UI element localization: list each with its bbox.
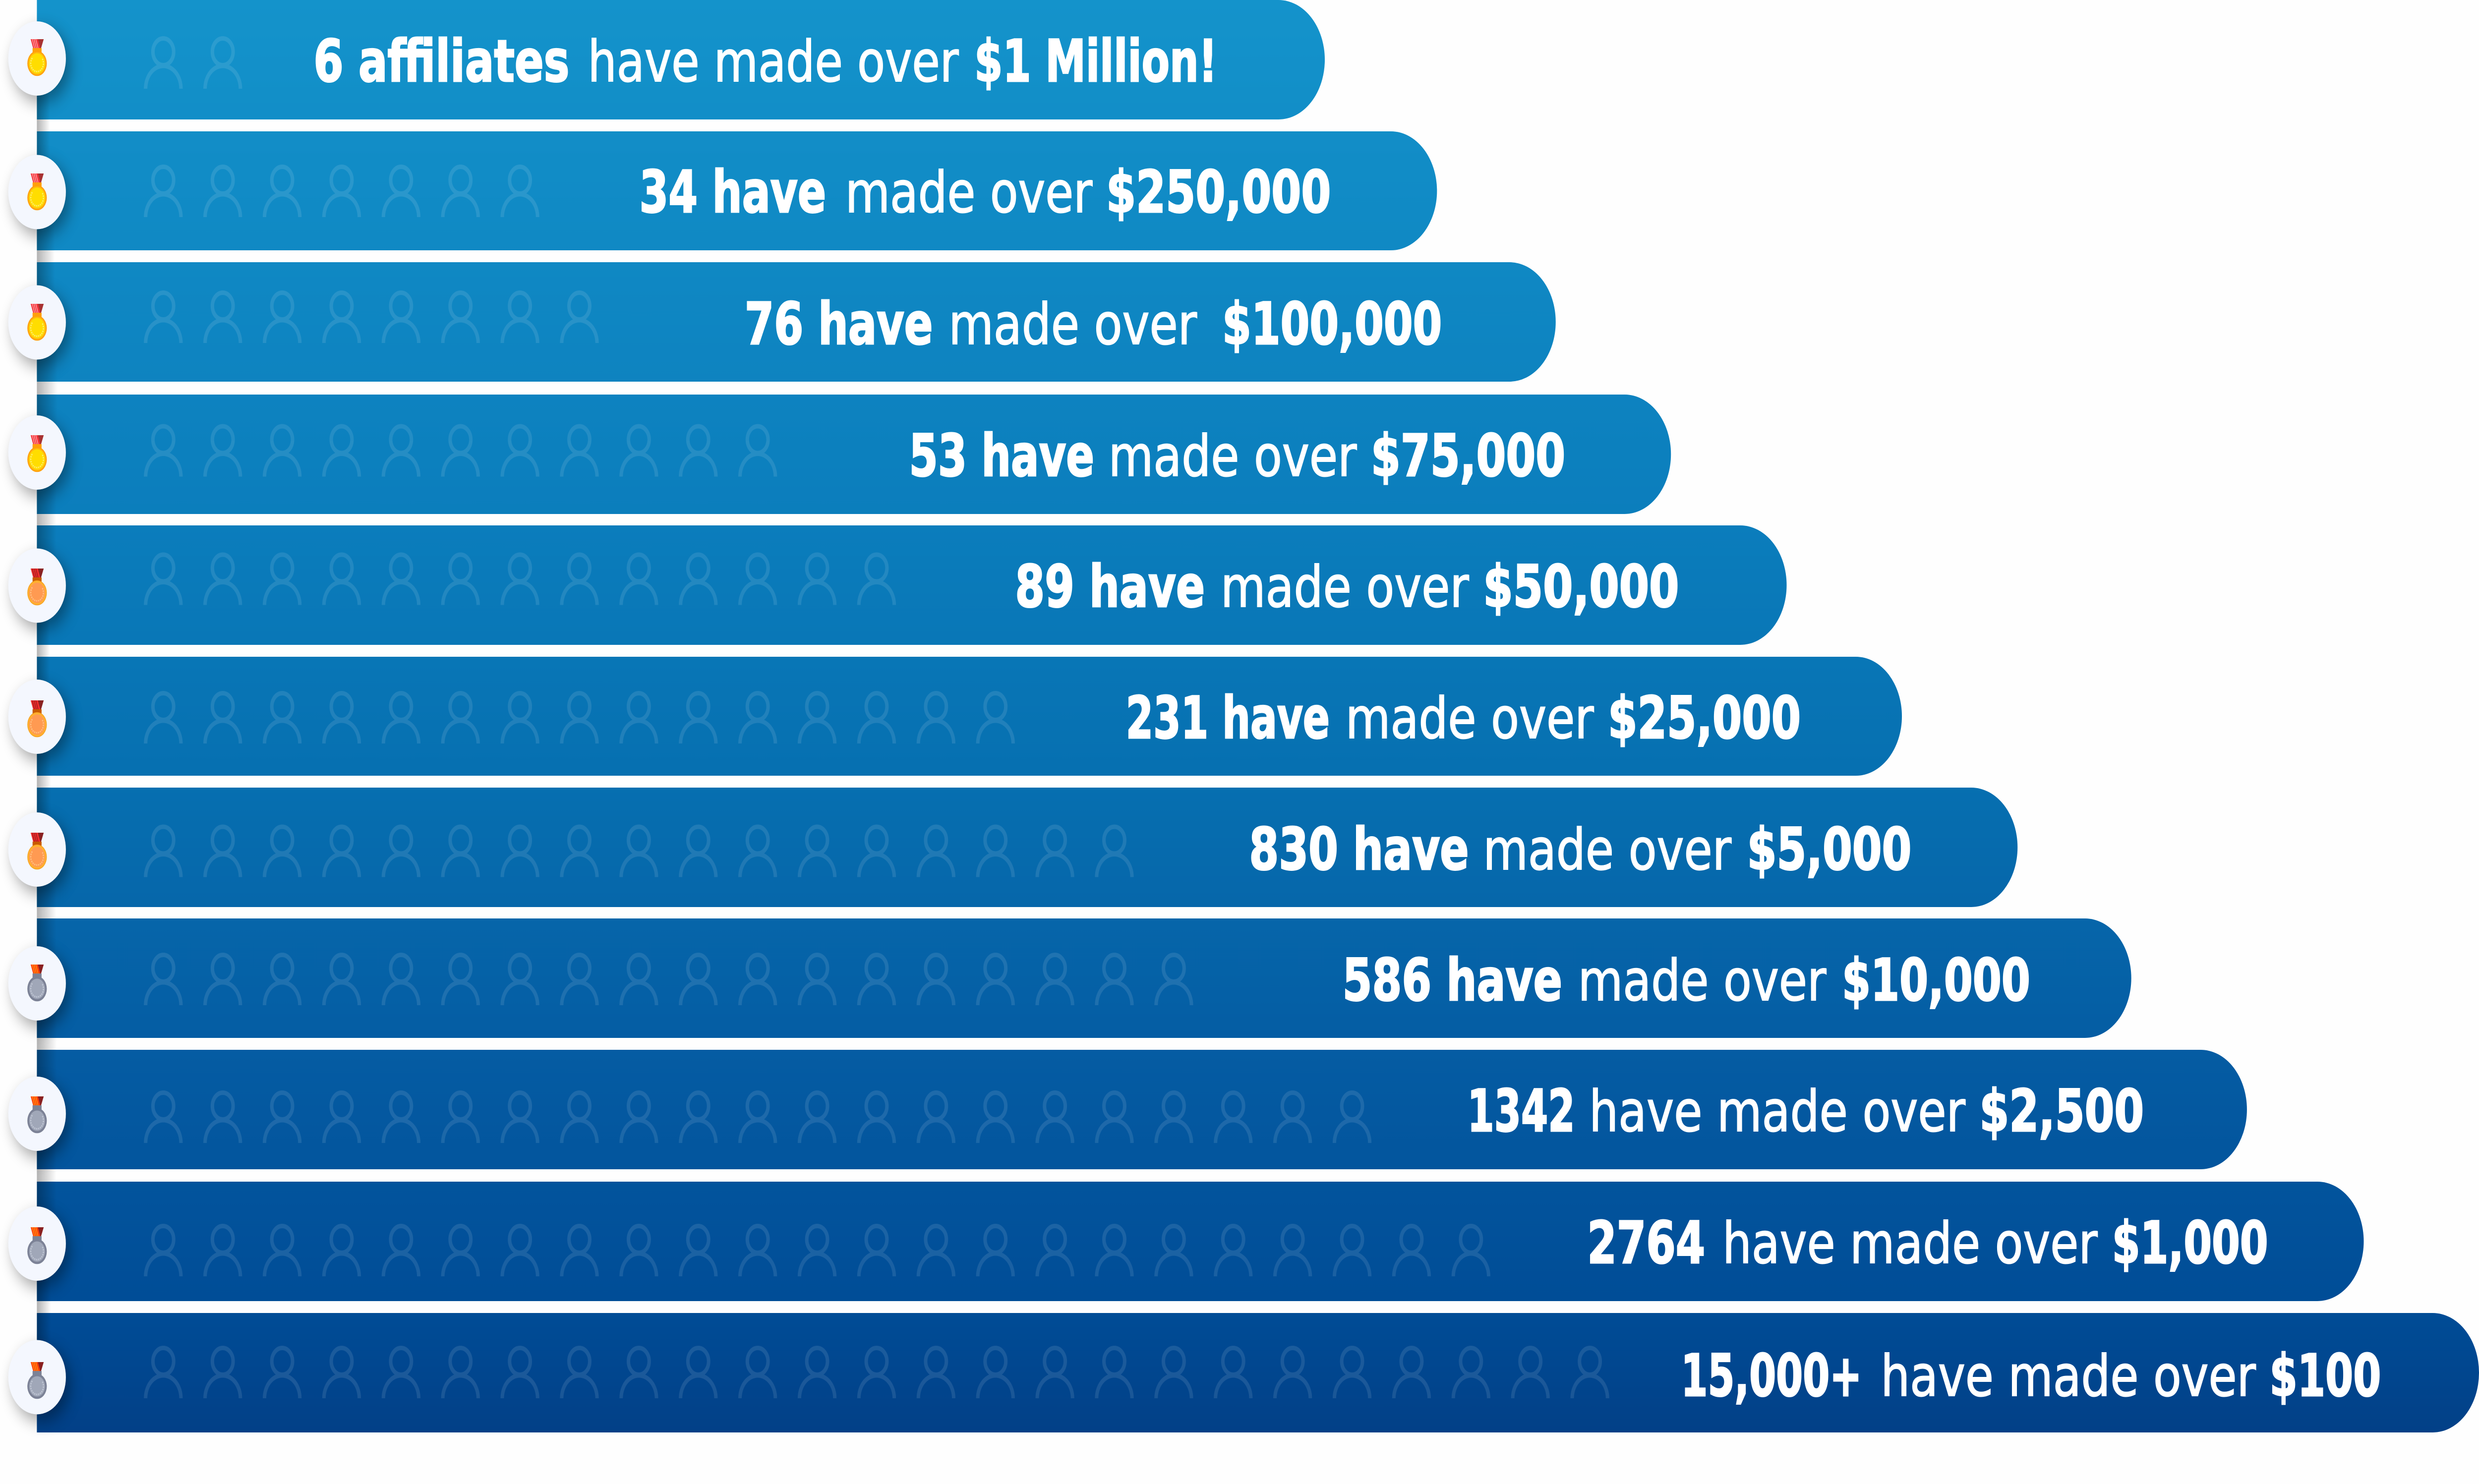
medal badge 3: gold: [8, 285, 66, 360]
bar row 3: 76 have made over $100,000: $100,000: [1222, 290, 1442, 358]
bar row 1: 6 affiliates over $1 Million: [37, 0, 1325, 119]
bar row 7: 830 have made over $5,000: made over: [1483, 817, 1731, 883]
bar row 11: 15,000+ have made over $100: 15,000+: [1681, 1342, 1862, 1410]
bar row 5: 89 have made over $50,000: 89 have: [1015, 553, 1205, 621]
bar row 10: 2764 have made over $1,000: have made over: [1722, 1211, 2098, 1277]
bar row 9: 1342 have made over $2,500: [37, 1050, 2247, 1169]
medal badge 11: silver: [8, 1340, 66, 1415]
bar row 9: 1342 have made over $2,500: $2,500: [1980, 1078, 2144, 1145]
bar row 8: 586 have made over $10,000: 586 have: [1343, 947, 1562, 1014]
medal badge 9: silver: [8, 1077, 66, 1151]
bar row 11: 15,000+ have made over $100: $100: [2270, 1342, 2381, 1410]
bar row 7: 830 have made over $5,000: [37, 788, 2017, 907]
bar row 9: 1342 have made over $2,500: 1342: [1468, 1078, 1575, 1145]
bar row 6: 231 have made over $25,000: 231 have: [1126, 685, 1330, 752]
bar row 5: 89 have made over $50,000: $50,000: [1483, 553, 1679, 621]
medal badge 4: gold: [8, 415, 66, 490]
bar row 10: 2764 have made over $1,000: 2764: [1587, 1209, 1705, 1277]
medal badge 2: gold: [8, 155, 66, 229]
medal badge 7: bronze: [8, 812, 66, 887]
medal badge 10: silver: [8, 1206, 66, 1281]
medal badge 1: gold: [8, 21, 66, 96]
bar row 5: 89 have made over $50,000: made over: [1221, 555, 1469, 621]
bar row 3: 76 have made over $100,000: made over: [948, 292, 1197, 358]
medal badge 8: silver: [8, 946, 66, 1021]
bar row 1: 6 affiliates over $1 Million: 6 affiliates: [313, 28, 569, 95]
bar row 9: 1342 have made over $2,500: have made over: [1589, 1079, 1965, 1145]
bar row 2: 34 have made over $250,000: 34 have: [640, 159, 826, 226]
bar row 8: 586 have made over $10,000: $10,000: [1842, 947, 2030, 1014]
bar row 1: 6 affiliates over $1 Million: have made over: [588, 29, 959, 95]
bar row 7: 830 have made over $5,000: 830 have: [1249, 816, 1469, 883]
circle drop shadows: [13, 28, 70, 1422]
bar row 3: 76 have made over $100,000: [37, 262, 1556, 382]
bar row 4: 53 have made over $75,000: 53 have: [909, 422, 1094, 490]
bar row 6: 231 have made over $25,000: [37, 657, 1902, 776]
bar row 1: 6 affiliates over $1 Million: $1 Million!: [974, 28, 1217, 95]
bar row 6: 231 have made over $25,000: $25,000: [1608, 685, 1801, 752]
bar row 11: 15,000+ have made over $100: have made over: [1881, 1344, 2256, 1410]
bar row 2: 34 have made over $250,000: [37, 131, 1437, 250]
medal badge 5: bronze: [8, 548, 66, 623]
bar row 8: 586 have made over $10,000: [37, 918, 2131, 1038]
bar row 4: 53 have made over $75,000: made over: [1109, 424, 1357, 490]
bar row 10: 2764 have made over $1,000: [37, 1182, 2364, 1301]
left edge shadow strips: [37, 58, 58, 1377]
bar row 10: 2764 have made over $1,000: $1,000: [2112, 1209, 2268, 1277]
bar row 11: 15,000+ have made over $100: [37, 1313, 2479, 1432]
bar row 3: 76 have made over $100,000: 76 have: [745, 290, 933, 358]
bar row 7: 830 have made over $5,000: $5,000: [1747, 816, 1911, 883]
bar row 2: 34 have made over $250,000: made over: [845, 160, 1092, 226]
bar row 6: 231 have made over $25,000: made over: [1346, 686, 1594, 752]
bar row 4: 53 have made over $75,000: $75,000: [1371, 422, 1565, 490]
bar row 8: 586 have made over $10,000: made over: [1578, 948, 1826, 1014]
bar row 2: 34 have made over $250,000: $250,000: [1106, 159, 1331, 226]
bar row 5: 89 have made over $50,000: [37, 525, 1787, 645]
medal badge 6: bronze: [8, 680, 66, 754]
bar row 4: 53 have made over $75,000: [37, 395, 1671, 514]
